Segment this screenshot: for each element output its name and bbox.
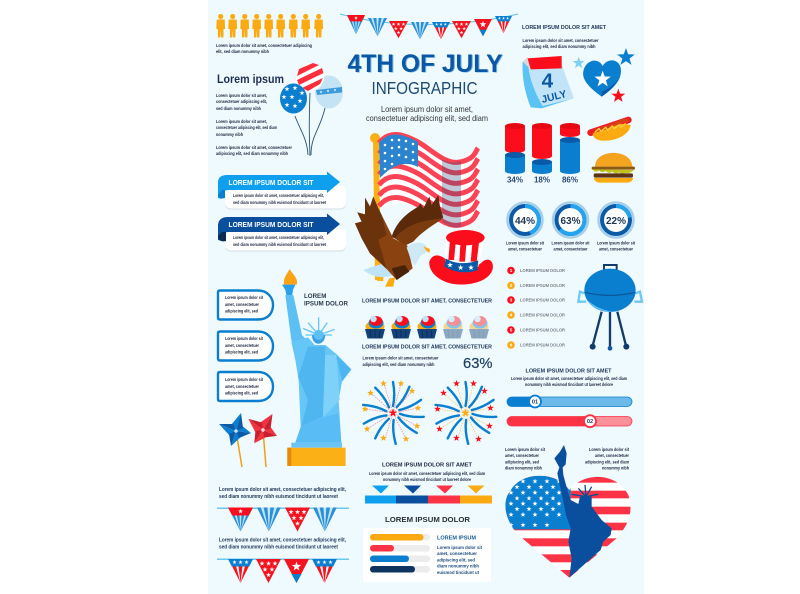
text: heart captions: amet, consectetuer [505, 453, 539, 459]
chart: donut 63% [553, 202, 588, 238]
text block: left column paragraphs: nonummy nibh [216, 132, 243, 138]
text block: left column paragraphs: Lorem ipsum dolor sit amet, consectetuer [216, 145, 292, 151]
icon: burger [592, 153, 635, 183]
text block: left column paragraphs: Lorem ipsum dolor sit amet, [216, 119, 267, 125]
chart: donut 44%: 44% [515, 216, 535, 227]
text: sliders heading [511, 368, 627, 388]
chart: cylinders [505, 123, 580, 184]
text: bunting paragraph two: Lorem ipsum dolor sit amet, consectetuer adipiscing elit, [219, 538, 346, 544]
callout boxes: left column: Lorem ipsum dolor sit [225, 295, 263, 301]
text: segmented bar heading: Lorem ipsum dolor sit amet, consectetuer adipiscing elit, sed diam [369, 471, 485, 477]
icon: hot dog [591, 120, 631, 141]
chart: cylinders: 86% [562, 176, 578, 184]
ribbon: light blue: Lorem ipsum dolor sit amet, consectetuer adipiscing elit, [233, 193, 324, 199]
text: sliders heading: nonummy nibh euismod tincidunt ut laoreet dolore [525, 382, 613, 388]
illustration: statue of liberty [282, 269, 351, 466]
pictogram: cupcakes [365, 316, 489, 338]
numbered list: LOREM IPSUM DOLOR [520, 343, 566, 348]
text: bunting paragraph one: sed diam nonummy nibh euismod tincidunt ut laoreet [219, 494, 338, 500]
text: intro: Lorem ipsum dolor sit amet, [381, 104, 473, 114]
ribbon: dark blue: Lorem ipsum dolor sit amet, consectetuer adipiscing elit, [233, 235, 324, 241]
slider 02 [507, 415, 632, 427]
background panel [208, 0, 644, 594]
callout boxes: left column [218, 290, 273, 401]
text: top right [522, 25, 607, 50]
text: heart captions: nonummy nibh [602, 466, 629, 472]
icon: calendar [522, 56, 574, 108]
text: top right: adipiscing elit, sed diam nonummy nibh [522, 44, 596, 50]
text: heart captions: adipiscing elit, sed [505, 460, 539, 466]
bunting: lower [217, 558, 349, 583]
chart: donut 44% [508, 202, 542, 238]
numbered list: LOREM IPSUM DOLOR [520, 283, 566, 288]
chart: cylinders: 34% [507, 176, 523, 184]
callout boxes: left column: adipiscing elit, sed [225, 308, 258, 314]
text block: left column paragraphs: adipiscing elit, sed diam nonummy nibh [216, 151, 288, 157]
slider 01: 01 [532, 400, 538, 406]
numbered list: 2 [510, 283, 513, 288]
icon: heart and stars [573, 48, 635, 102]
text: cupcake stat: adipiscing elit, sed diam nonummy nibh [362, 362, 435, 368]
text: bunting paragraph one: Lorem ipsum dolor sit amet, consectetuer adipiscing elit, [219, 487, 346, 493]
text: donut captions: amet, consectetuer [554, 246, 588, 252]
text: intro [366, 104, 488, 123]
heading: Lorem ipsum: Lorem ipsum [217, 74, 284, 86]
text: cupcake stat: LOREM IPSUM DOLOR SIT AMET, CONSECTETUER [362, 344, 492, 350]
title: 4TH OF JULY [348, 50, 503, 78]
panel: progress bars card: LOREM IPSUM [437, 536, 477, 542]
text: statue label: LOREM [304, 293, 326, 300]
chart: donut 63%: 63% [560, 216, 581, 227]
illustration: uncle sam hat [429, 230, 493, 285]
numbered list: 5 [510, 328, 513, 333]
title: 4TH OF JULY [348, 50, 504, 78]
icon row: people [216, 14, 323, 38]
text: statue label [304, 293, 349, 308]
callout boxes: left column: amet, consectetuer [225, 302, 259, 308]
numbered list: 3 [510, 298, 513, 303]
text: cupcake stat: 63% [463, 356, 493, 372]
heading: card title: LOREM IPSUM DOLOR [385, 515, 471, 524]
text: people caption: elit, sed diam nonummy nibh [216, 49, 269, 55]
text: heart captions [505, 447, 630, 472]
icon: calendar: JULY [541, 89, 568, 106]
callout boxes: left column: Lorem ipsum dolor sit [225, 336, 263, 342]
text: donut captions: Lorem ipsum dolor sit [506, 240, 544, 246]
text block: left column paragraphs [216, 93, 292, 157]
panel: progress bars card: Lorem ipsum dolor sit [437, 545, 482, 551]
callout boxes: left column: amet, consectetuer [225, 343, 259, 349]
chart: segmented bar [365, 486, 492, 504]
slider 01 [507, 396, 632, 408]
panel: progress bars card: diam nonummy nibh [437, 564, 479, 570]
ribbon: light blue: LOREM IPSUM DOLOR SIT [228, 180, 314, 187]
callout boxes: left column: adipiscing elit, sed [225, 390, 258, 396]
numbered list [507, 267, 566, 349]
illustration: eagle [355, 195, 443, 287]
icon: firework left [362, 380, 424, 444]
panel: progress bars card: adipiscing elit, sed [437, 558, 475, 564]
text: cupcake heading: LOREM IPSUM DOLOR SIT AMET, CONSECTETUER [362, 298, 492, 304]
numbered list: 6 [510, 343, 513, 348]
callout boxes: left column: Lorem ipsum dolor sit [225, 377, 263, 383]
text: segmented bar heading: LOREM IPSUM DOLOR SIT AMET [382, 462, 473, 468]
text: donut captions [506, 240, 635, 252]
text block: left column paragraphs: Lorem ipsum dolor sit amet, [216, 93, 267, 99]
text: statue label: IPSUM DOLOR [304, 300, 349, 308]
icon: calendar: 4 [542, 69, 554, 92]
icon: red pinwheel [243, 408, 282, 467]
icon: firework right [434, 380, 496, 444]
ribbon: dark blue: sed diam nonummy nibh euismod tincidunt ut laoreet [233, 242, 326, 248]
numbered list: LOREM IPSUM DOLOR [520, 328, 566, 333]
numbered list: LOREM IPSUM DOLOR [520, 298, 566, 303]
ribbon: dark blue [218, 214, 346, 252]
text: heart captions: adipiscing elit, sed diam [585, 460, 630, 466]
text: heart captions: amet, consectetuer [595, 453, 629, 459]
text: people caption: Lorem ipsum dolor sit amet, consectetuer adipiscing [216, 43, 312, 49]
chart: cylinders: 18% [534, 176, 550, 184]
slider 02: 02 [587, 419, 593, 425]
ribbon: dark blue: LOREM IPSUM DOLOR SIT [228, 222, 314, 229]
illustration: flag on pole [370, 133, 478, 280]
text: donut captions: amet, consectetuer [599, 246, 633, 252]
text: heart captions: Lorem ipsum dolor sit [505, 447, 545, 453]
text block: left column paragraphs: consectetuer adipiscing elit, [216, 99, 267, 105]
numbered list: 4 [510, 313, 513, 318]
text: top right: LOREM IPSUM DOLOR SIT AMET [522, 25, 607, 31]
text: cupcake stat: Lorem ipsum dolor sit amet, consectetuer [362, 356, 439, 362]
text: sliders heading: LOREM IPSUM DOLOR SIT AMET [526, 368, 612, 374]
text: heart captions: Lorem ipsum dolor sit [589, 447, 629, 453]
text: donut captions: amet, consectetuer [508, 246, 542, 252]
numbered list: LOREM IPSUM DOLOR [520, 313, 566, 318]
text: top right: Lorem ipsum dolor sit amet, consectetuer [522, 38, 599, 44]
text: donut captions: Lorem ipsum dolor sit [552, 240, 590, 246]
icon: balloons [280, 63, 343, 156]
text: bunting paragraph two: sed diam nonummy nibh euismod tincidunt ut laoreet [219, 544, 338, 550]
text: bunting paragraph two [219, 538, 346, 550]
text: segmented bar heading: nonummy nibh euismod tincidunt ut laoreet dolore [383, 477, 471, 483]
ribbon: light blue [218, 172, 346, 210]
text block: left column paragraphs: consectetuer adipiscing elit, sed diam [216, 125, 277, 131]
text: donut captions: Lorem ipsum dolor sit [597, 240, 635, 246]
icon: grill [578, 265, 642, 351]
icon: blue pinwheel [219, 413, 251, 467]
text block: left column paragraphs: sed diam nonummy nibh [216, 106, 261, 112]
subtitle: INFOGRAPHIC [372, 78, 478, 98]
panel: progress bars card: amet, consectetuer [437, 551, 477, 557]
panel: progress bars card: euismod tincidunt ut [437, 570, 479, 576]
text: cupcake stat [362, 344, 493, 372]
numbered list: 1 [510, 268, 513, 273]
text: segmented bar heading [369, 462, 485, 483]
text: people caption [216, 43, 312, 55]
bunting: top garland [340, 14, 518, 39]
callout boxes: left column: adipiscing elit, sed [225, 350, 258, 356]
numbered list: LOREM IPSUM DOLOR [520, 268, 566, 273]
chart: donut 22%: 22% [606, 216, 626, 227]
text: heart captions: diam nonummy nibh [505, 466, 542, 472]
chart: donut 22% [598, 202, 634, 238]
illustration: flag heart with statue silhouette [505, 445, 630, 578]
text: bunting paragraph one [219, 487, 346, 500]
callout boxes: left column: amet, consectetuer [225, 384, 259, 390]
bunting: upper [217, 508, 349, 532]
panel: progress bars card [363, 528, 491, 582]
text: intro: consectetuer adipiscing elit, sed diam [366, 113, 488, 123]
text: sliders heading: Lorem ipsum dolor sit amet, consectetuer adipiscing elit, sed diam [511, 376, 627, 382]
ribbon: light blue: sed diam nonummy nibh euismod tincidunt ut laoreet [233, 200, 326, 206]
